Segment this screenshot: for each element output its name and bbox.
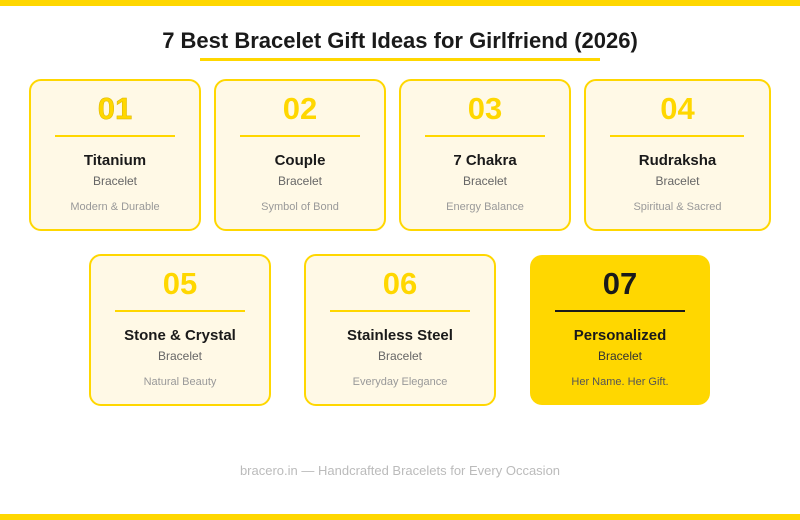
card 03: 7 Chakra: [399, 79, 571, 231]
type: Bracelet: [463, 174, 507, 188]
divider: [425, 135, 545, 137]
name: Personalized: [574, 327, 666, 344]
divider: [610, 135, 744, 137]
number 01: 01: [98, 91, 132, 126]
tagline: Her Name. Her Gift.: [571, 376, 669, 388]
card 02: Couple: [214, 79, 386, 231]
divider: [330, 310, 470, 312]
type: Bracelet: [655, 174, 700, 188]
card 01: Titanium: [29, 79, 201, 231]
divider: [55, 135, 175, 137]
name: Couple: [275, 152, 325, 169]
type: Bracelet: [278, 174, 322, 188]
name: Stone & Crystal: [124, 327, 236, 344]
name: Titanium: [84, 152, 146, 169]
name: Stainless Steel: [347, 327, 453, 344]
bottom accent bar: [0, 514, 800, 520]
type: Bracelet: [598, 349, 642, 363]
number 07: 07: [603, 266, 637, 301]
card 06: Stainless Steel: [304, 254, 496, 406]
top accent bar: [0, 0, 800, 6]
name: 7 Chakra: [453, 152, 517, 169]
title underline: [200, 58, 600, 61]
tagline: Modern & Durable: [70, 201, 160, 213]
type: Bracelet: [378, 349, 422, 363]
card 07: Personalized (highlighted): [530, 255, 710, 405]
footer text: bracero.in — Handcrafted Bracelets for Every Occasion: [240, 463, 560, 478]
number 06: 06: [383, 266, 417, 301]
name: Rudraksha: [639, 152, 716, 169]
divider: [555, 310, 685, 312]
tagline: Natural Beauty: [144, 376, 216, 388]
card 05: Stone & Crystal: [89, 254, 271, 406]
title: 7 Best Bracelet Gift Ideas for Girlfriend (2026): [162, 28, 638, 53]
tagline: Symbol of Bond: [261, 201, 339, 213]
number 03: 03: [468, 91, 502, 126]
number 02: 02: [283, 91, 317, 126]
divider: [240, 135, 360, 137]
tagline: Everyday Elegance: [353, 376, 447, 388]
divider: [115, 310, 245, 312]
type: Bracelet: [93, 174, 137, 188]
tagline: Energy Balance: [446, 201, 524, 213]
number 04: 04: [660, 91, 695, 126]
tagline: Spiritual & Sacred: [633, 201, 722, 213]
type: Bracelet: [158, 349, 202, 363]
card 04: Rudraksha: [584, 79, 771, 231]
number 05: 05: [163, 266, 197, 301]
